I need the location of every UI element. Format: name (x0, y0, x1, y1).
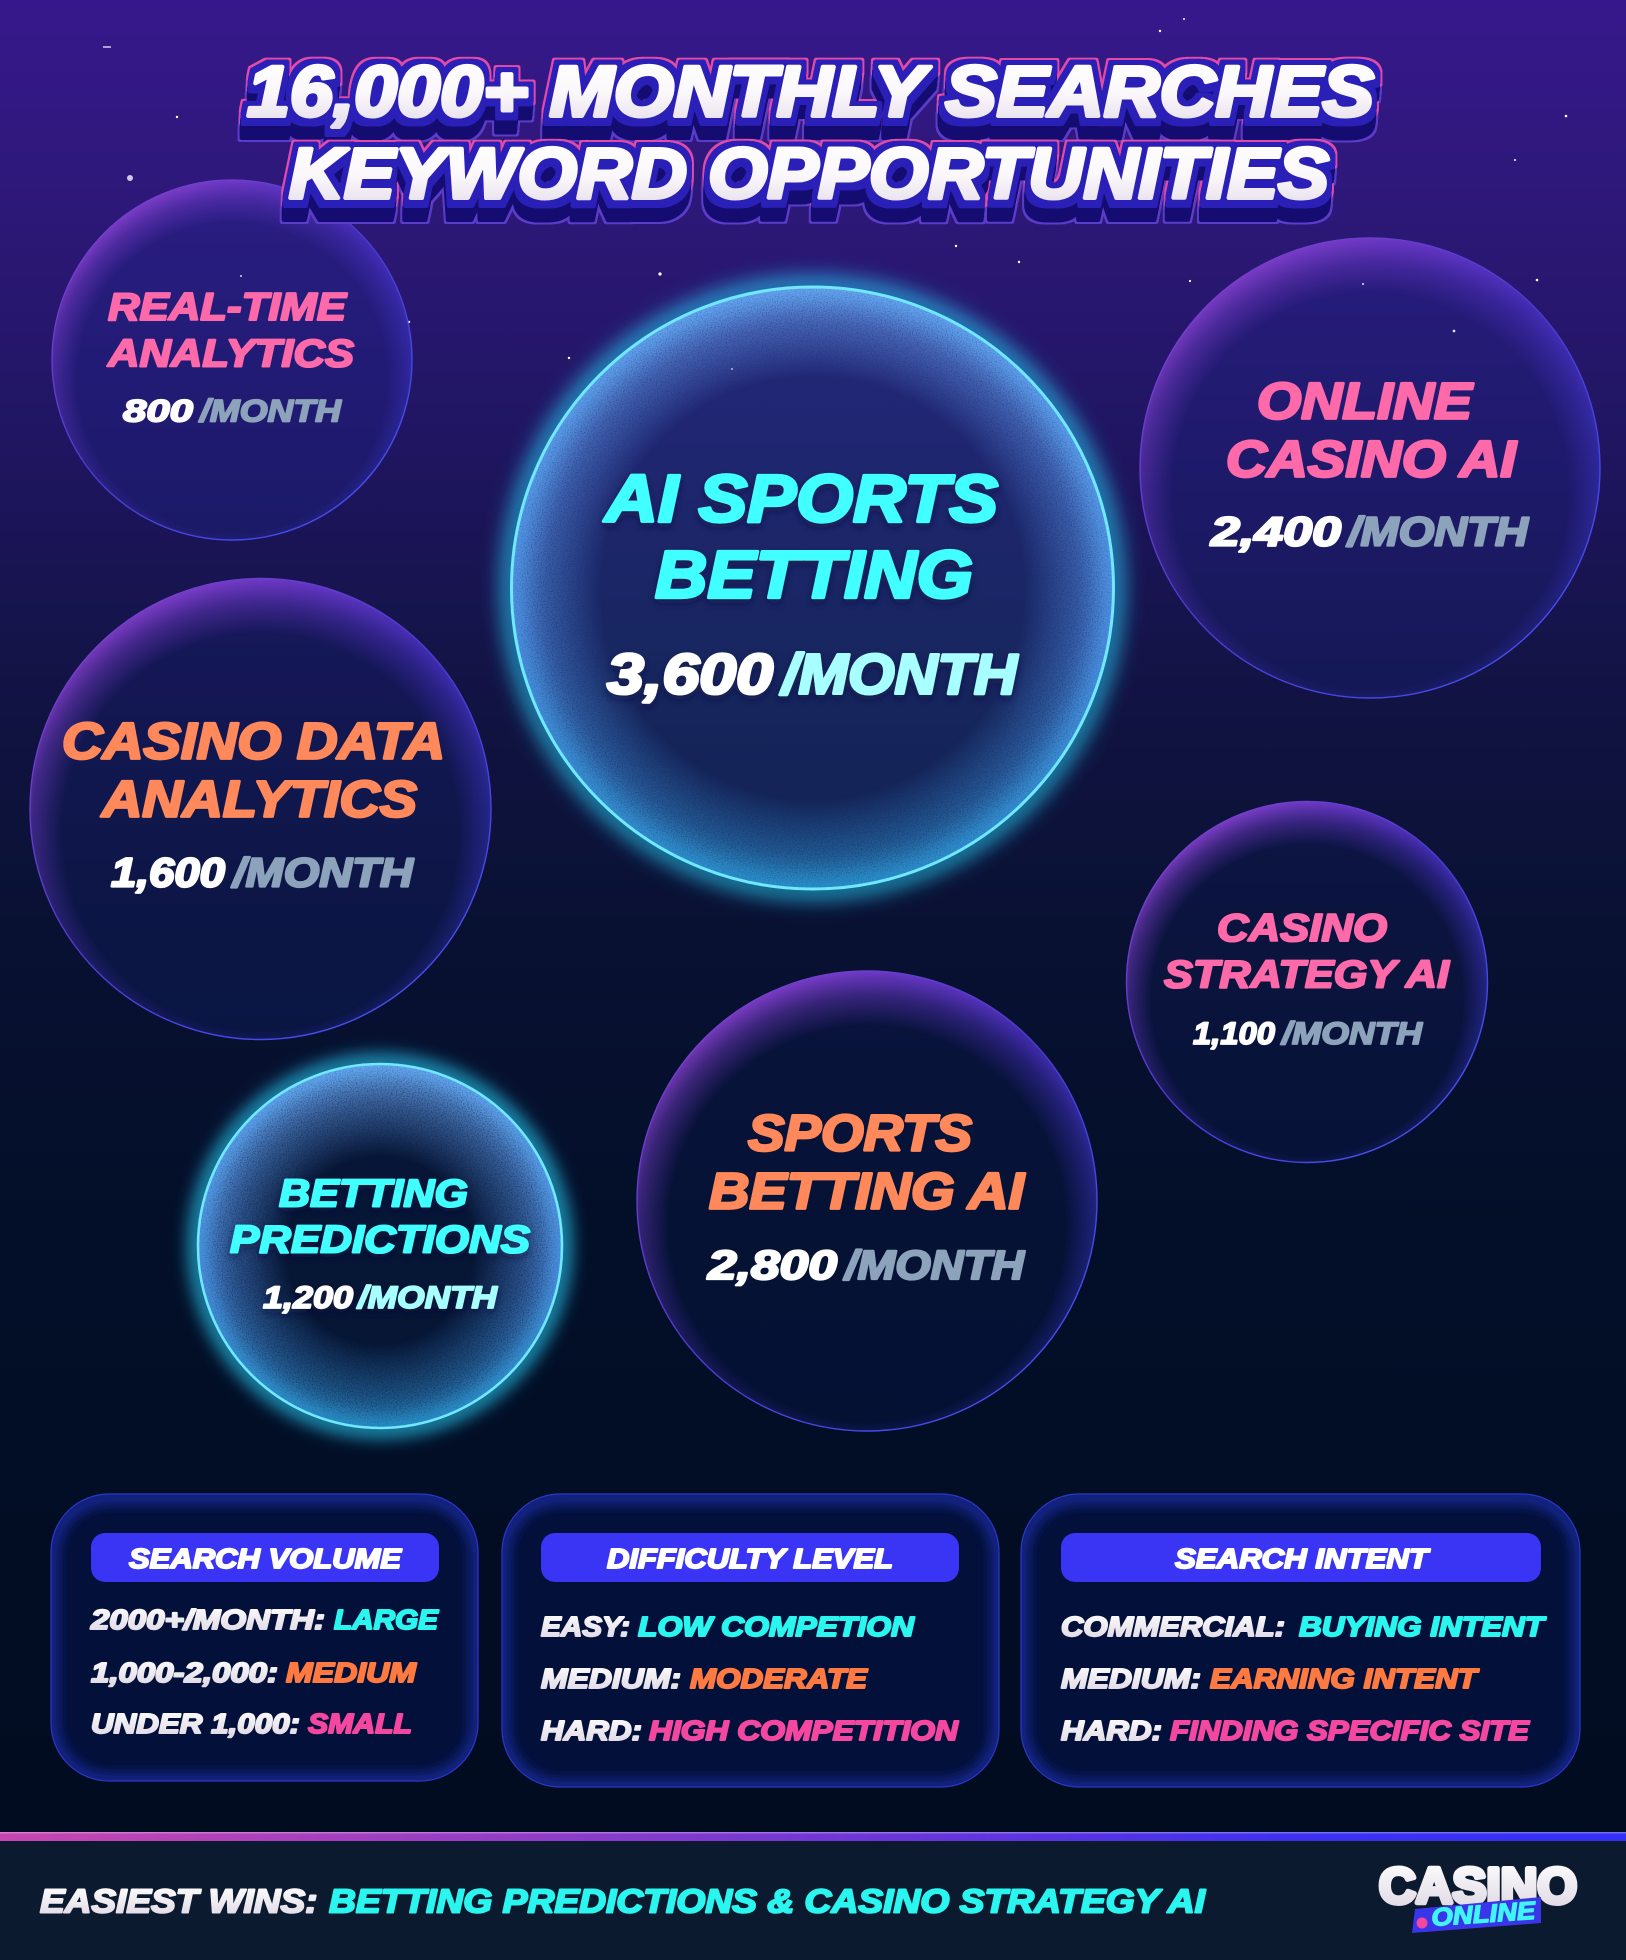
keyword name: CASINO DATA (62, 712, 445, 770)
keyword name: ONLINE (1257, 372, 1474, 430)
keyword name: CASINO (1217, 907, 1387, 950)
logo: Casino.Online: ONLINE (1430, 1897, 1538, 1932)
panel: search intent (1021, 1494, 1580, 1787)
keyword name: BETTING AI (709, 1162, 1026, 1220)
keyword name: REAL-TIME (108, 286, 347, 329)
bubble: Online Casino AI (1140, 238, 1600, 698)
monthly volume: /MONTH (198, 392, 342, 428)
monthly volume: 2,800 (707, 1242, 837, 1288)
monthly volume (607, 642, 1019, 706)
title: KEYWORD OPPORTUNITIES (289, 135, 1329, 214)
title: 16,000+ MONTHLY SEARCHES (247, 53, 1374, 132)
legend rows: COMMERCIAL: (1061, 1611, 1285, 1642)
bubble: Real-Time Analytics (52, 180, 412, 540)
bubble: AI Sports Betting (510, 286, 1114, 890)
monthly volume: 800 (123, 392, 194, 428)
keyword name: ANALYTICS (107, 332, 354, 376)
legend rows: EARNING INTENT (1210, 1663, 1480, 1694)
monthly volume (1193, 1015, 1423, 1051)
panel heading: DIFFICULTY LEVEL (607, 1543, 893, 1574)
legend rows: 2000+/MONTH: (90, 1604, 325, 1635)
keyword name: CASINO AI (1226, 430, 1518, 488)
legend rows: LOW COMPETION (638, 1611, 915, 1642)
keyword name: ANALYTICS (100, 770, 417, 828)
monthly volume: /MONTH (1346, 508, 1530, 554)
monthly volume: 3,600 (607, 642, 773, 706)
legend rows: MEDIUM (286, 1657, 417, 1688)
legend rows (90, 1604, 440, 1739)
legend rows: MODERATE (690, 1663, 869, 1694)
monthly volume: 1,600 (111, 850, 225, 896)
legend rows: MEDIUM: (541, 1663, 681, 1694)
panel heading (1061, 1533, 1541, 1582)
legend rows: 1,000-2,000: (91, 1657, 278, 1688)
monthly volume: /MONTH (779, 642, 1019, 706)
keyword name (1226, 372, 1518, 488)
keyword name (709, 1104, 1026, 1220)
footer band (0, 1832, 1626, 1960)
legend rows: HARD: (1061, 1715, 1162, 1746)
legend rows: SMALL (308, 1708, 412, 1739)
keyword name: BETTING (279, 1172, 468, 1216)
monthly volume: /MONTH (843, 1242, 1026, 1288)
monthly volume (123, 392, 342, 428)
keyword name (107, 286, 354, 376)
keyword name (603, 462, 998, 612)
bubble: Betting Predictions (197, 1063, 563, 1429)
legend rows (1061, 1611, 1547, 1746)
bubble: Sports Betting AI (637, 971, 1097, 1431)
keyword name: AI SPORTS (603, 462, 998, 536)
keyword name: BETTING (655, 538, 973, 612)
monthly volume (1210, 508, 1530, 554)
logo: Casino.Online: CASINO (1379, 1858, 1577, 1914)
monthly volume: 1,200 (263, 1279, 354, 1315)
legend rows: BUYING INTENT (1299, 1611, 1547, 1642)
legend rows: HARD: (541, 1715, 642, 1746)
monthly volume (707, 1242, 1026, 1288)
legend rows: LARGE (334, 1604, 440, 1635)
keyword name (230, 1172, 530, 1262)
title (247, 53, 1374, 214)
monthly volume (263, 1279, 498, 1315)
legend rows: FINDING SPECIFIC SITE (1170, 1715, 1531, 1746)
keyword name: SPORTS (748, 1104, 972, 1162)
monthly volume: 1,100 (1193, 1015, 1275, 1051)
panel heading: SEARCH VOLUME (129, 1543, 403, 1574)
panel heading (91, 1533, 439, 1582)
keyword name (62, 712, 445, 828)
monthly volume (111, 850, 415, 896)
legend rows: UNDER 1,000: (91, 1708, 300, 1739)
monthly volume: /MONTH (231, 850, 415, 896)
monthly volume: /MONTH (1280, 1015, 1423, 1051)
legend rows: EASY: (541, 1611, 630, 1642)
legend rows (541, 1611, 959, 1746)
footer takeaway: EASIEST WINS: (40, 1884, 318, 1920)
keyword name: PREDICTIONS (230, 1218, 530, 1262)
panel heading: SEARCH INTENT (1175, 1543, 1430, 1574)
monthly volume: /MONTH (356, 1279, 498, 1315)
footer takeaway: BETTING PREDICTIONS & CASINO STRATEGY AI (329, 1884, 1206, 1920)
monthly volume: 2,400 (1210, 508, 1341, 554)
keyword name: STRATEGY AI (1164, 954, 1450, 996)
bubble: Casino Data Analytics (30, 578, 491, 1040)
keyword name (1164, 907, 1450, 996)
legend rows: HIGH COMPETITION (649, 1715, 959, 1746)
footer takeaway (40, 1884, 1206, 1920)
panel: search volume (51, 1494, 478, 1781)
legend rows: MEDIUM: (1061, 1663, 1201, 1694)
bubble: Casino Strategy AI (1126, 802, 1488, 1162)
panel heading (541, 1533, 959, 1582)
panel: difficulty level (502, 1494, 999, 1787)
